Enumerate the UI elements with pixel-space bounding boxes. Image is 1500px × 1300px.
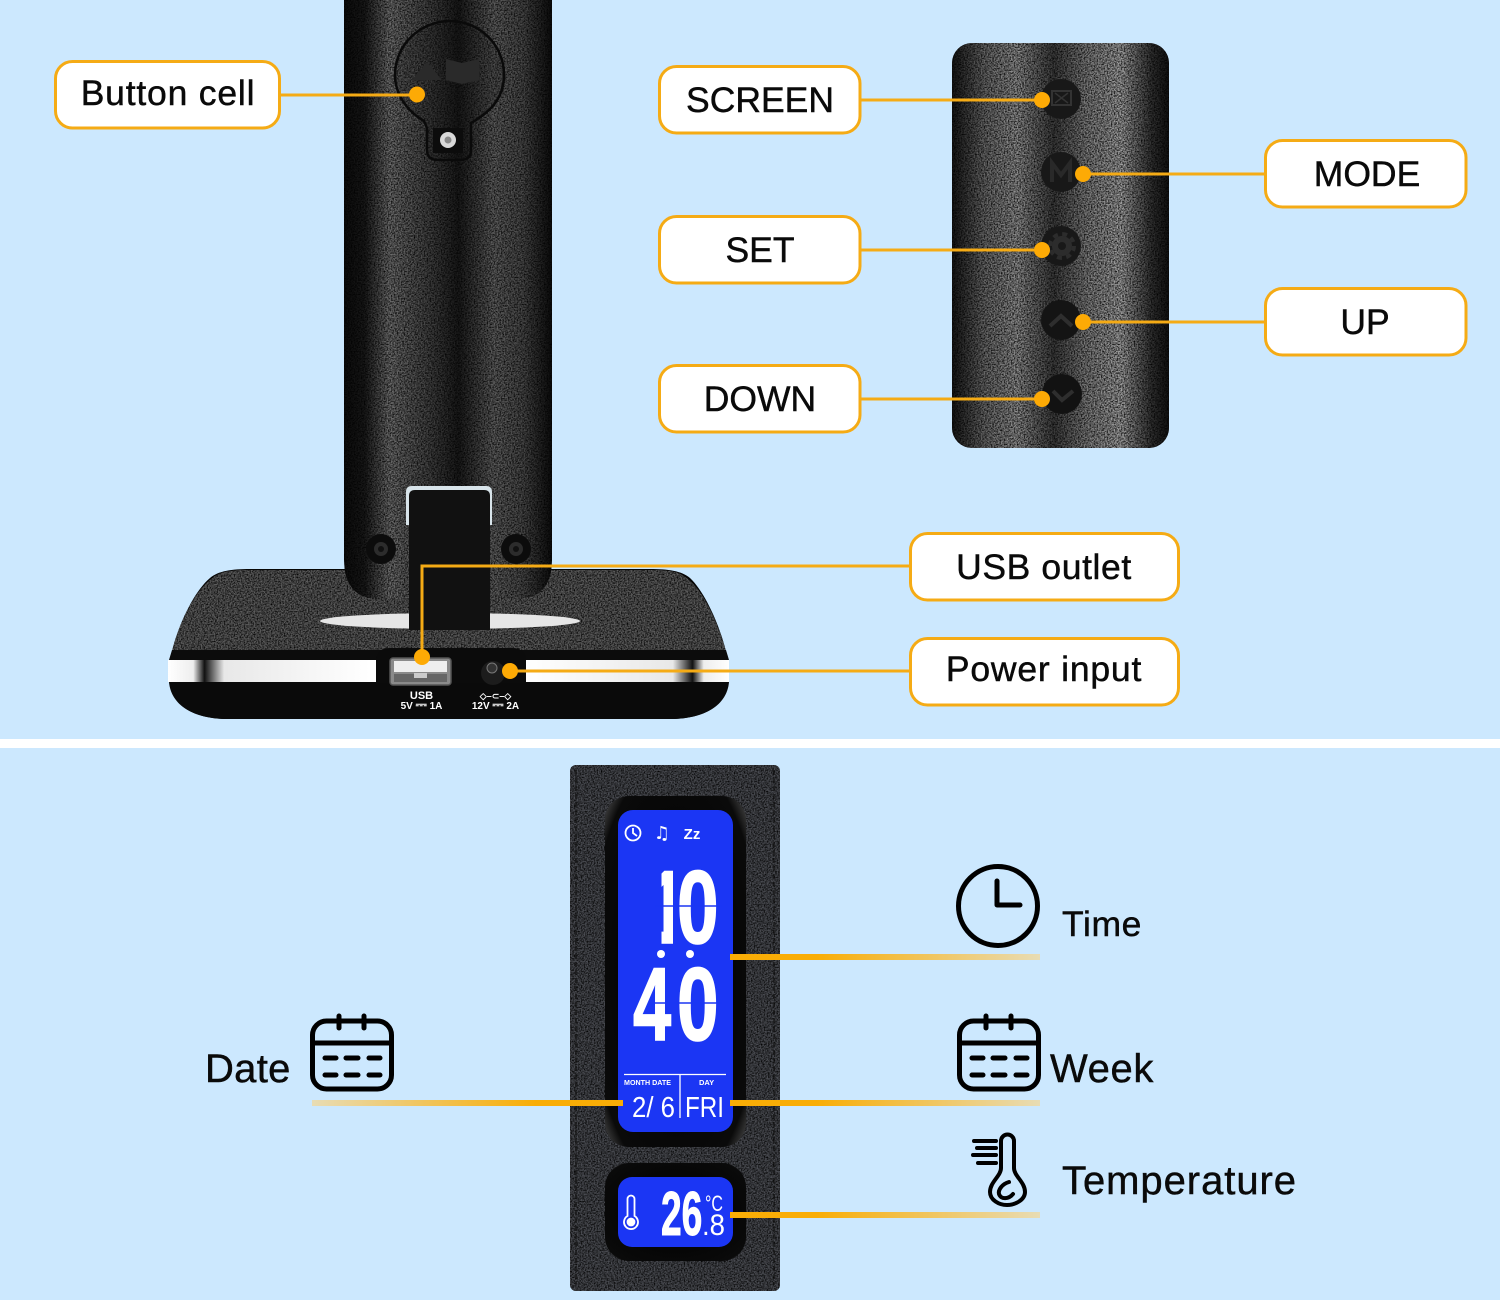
- lamp pole: [344, 0, 552, 599]
- time minutes: 0: [677, 947, 719, 1063]
- display unit: [570, 765, 780, 1291]
- connector: MODE: [1075, 166, 1265, 182]
- alarm icon: [626, 826, 640, 840]
- label: Button cell: [56, 62, 280, 128]
- colon: [657, 950, 694, 958]
- power jack: [481, 661, 505, 685]
- leader: Date: [312, 1100, 623, 1106]
- label: UP: [1266, 288, 1466, 355]
- text: Week: Week: [1050, 1047, 1154, 1091]
- mode button: [1041, 152, 1081, 192]
- label: USB outlet: [910, 534, 1178, 600]
- label: SCREEN: SCREEN: [686, 80, 834, 120]
- sleep icon: Zz: [684, 826, 700, 843]
- month date label: MONTH DATE: [624, 1078, 671, 1087]
- icon: clock: [958, 866, 1038, 946]
- text: Date: Date: [205, 1047, 291, 1091]
- connector: USB outlet: [414, 566, 910, 665]
- segment gaps: [655, 906, 722, 1003]
- temperature bezel: [605, 1163, 746, 1261]
- up button: [1041, 300, 1081, 340]
- music icon: ♫: [654, 823, 670, 844]
- label: SET: [660, 216, 860, 283]
- temperature lcd screen: [618, 1177, 733, 1248]
- warning triangle icon: [412, 62, 442, 80]
- label: Button cell: Button cell: [81, 73, 255, 113]
- temperature decimal: .8: [702, 1209, 725, 1242]
- icon: week calendar: [960, 1016, 1038, 1089]
- divider band: [0, 739, 1500, 748]
- label: DOWN: DOWN: [704, 379, 816, 419]
- text: Temperature: Temperature: [1062, 1159, 1297, 1203]
- button panel: [952, 43, 1169, 448]
- usb port label: USB: [410, 690, 433, 702]
- down button: [1042, 374, 1082, 414]
- main lcd screen: [618, 810, 733, 1132]
- battery cover: [395, 21, 504, 160]
- connector: Button cell: [279, 86, 425, 102]
- temperature value: 26: [661, 1179, 702, 1248]
- power port label: 12V ⎓ 2A: [472, 696, 519, 712]
- leader: Time: [730, 954, 1040, 960]
- icon: date calendar: [312, 1016, 392, 1089]
- date header rules: [624, 1074, 726, 1118]
- pole screw left: [366, 534, 396, 564]
- time hours: 0: [677, 850, 719, 966]
- day label: DAY: [699, 1078, 714, 1087]
- usb port label: 5V ⎓ 1A: [401, 696, 442, 712]
- usb port: [390, 658, 451, 685]
- label: DOWN: [660, 366, 860, 432]
- set button: [1041, 226, 1081, 266]
- time hours: [662, 870, 716, 945]
- label: USB outlet: USB outlet: [956, 547, 1132, 587]
- time minutes: [633, 946, 719, 1063]
- screen button: [1041, 79, 1081, 119]
- label: MODE: [1266, 140, 1466, 207]
- manual book icon: [446, 59, 479, 84]
- icon: thermometer: [973, 1134, 1025, 1205]
- temperature unit: °C: [705, 1191, 723, 1216]
- date value: 2/ 6: [632, 1092, 675, 1124]
- label: SET: SET: [725, 230, 795, 270]
- connector: Power input: [502, 663, 910, 679]
- connector: SCREEN: [860, 92, 1050, 108]
- label: SCREEN: [660, 66, 860, 133]
- main bezel: [605, 796, 746, 1147]
- text: Time: Time: [1062, 904, 1142, 944]
- connector: SET: [860, 242, 1050, 258]
- label: Power input: [910, 638, 1178, 705]
- cover screw: [433, 128, 463, 153]
- time hours: 1: [648, 849, 686, 965]
- day value: FRI: [685, 1092, 724, 1124]
- connector: DOWN: [860, 391, 1050, 407]
- label: Power input: Power input: [946, 649, 1142, 689]
- leader: Week: [730, 1100, 1040, 1106]
- usb and power port panel: [376, 648, 526, 712]
- label: MODE: MODE: [1314, 154, 1420, 194]
- connector: UP: [1075, 314, 1265, 330]
- power port label: ◇–⊂–◇: [479, 691, 512, 701]
- thermometer icon: [624, 1196, 638, 1229]
- label: UP: UP: [1340, 302, 1390, 342]
- hinge bracket: [406, 486, 492, 630]
- lamp base: [168, 569, 729, 719]
- pole screw right: [501, 534, 531, 564]
- leader: Temperature: [730, 1212, 1040, 1218]
- time minutes: 4: [633, 946, 671, 1062]
